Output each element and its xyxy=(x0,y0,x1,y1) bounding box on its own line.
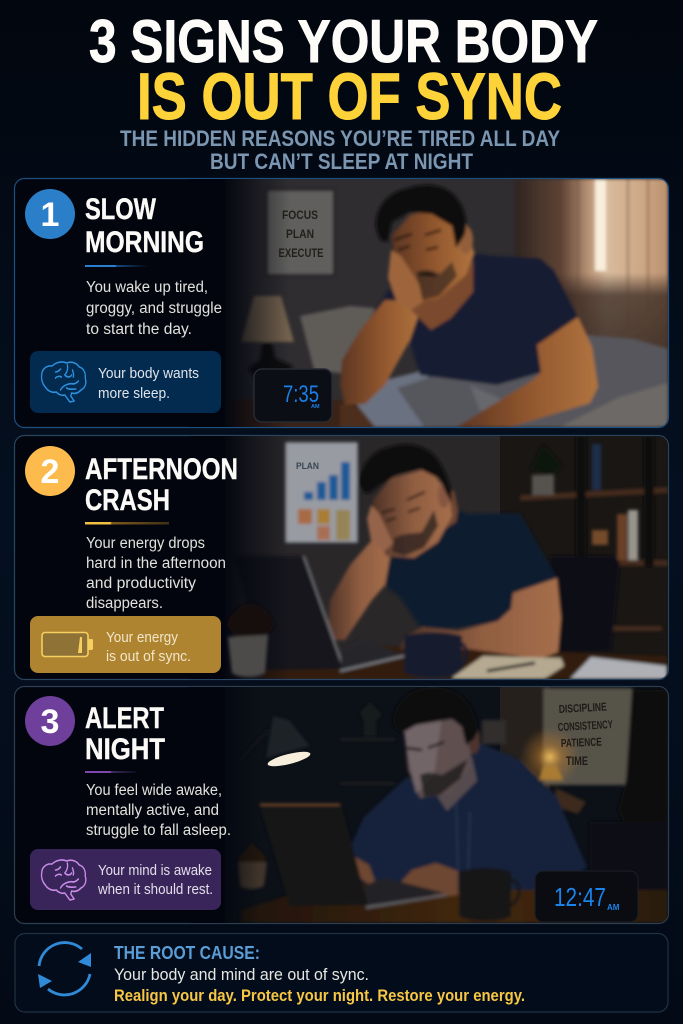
label: THE ROOT CAUSE: xyxy=(114,943,260,963)
icon: sync arrows xyxy=(38,943,91,995)
bookshelf xyxy=(520,487,668,631)
mug xyxy=(459,868,511,921)
alarm clock 12:47: AM xyxy=(607,903,620,912)
callout: mind is awake xyxy=(30,849,221,910)
desk xyxy=(240,880,668,923)
whiteboard xyxy=(285,442,358,543)
photo: man awake at laptop xyxy=(190,687,668,923)
eyes and brows xyxy=(394,230,441,250)
poster text: EXECUTE xyxy=(278,246,324,260)
heading: slow morning: MORNING xyxy=(85,226,204,259)
hair xyxy=(393,687,478,745)
number badge 1 xyxy=(25,189,75,239)
alarm clock 12:47 xyxy=(535,871,638,922)
desk xyxy=(262,646,667,679)
callout: energy out of sync: Your energy xyxy=(106,630,179,646)
description text: groggy, and struggle xyxy=(86,300,222,317)
laptop base xyxy=(365,878,445,907)
plant on shelf xyxy=(530,444,563,476)
description text: struggle to fall asleep. xyxy=(86,822,231,839)
desk lamp xyxy=(240,730,268,760)
bedside table xyxy=(240,398,356,427)
beard and moustache xyxy=(416,262,457,300)
poster words xyxy=(558,701,613,768)
heading: alert night: ALERT xyxy=(85,702,164,735)
hair xyxy=(376,185,466,248)
description text xyxy=(86,535,226,612)
heading: alert night: NIGHT xyxy=(85,733,165,766)
neck xyxy=(409,260,473,330)
left fade xyxy=(190,436,290,679)
title xyxy=(89,8,598,133)
callout: energy out of sync: is out of sync. xyxy=(106,649,191,665)
poster text: PLAN xyxy=(286,227,314,241)
description text: Your energy drops xyxy=(86,535,205,552)
pot plant xyxy=(238,843,266,867)
poster words: DISCIPLINE xyxy=(559,701,607,716)
poster xyxy=(543,688,632,785)
bedding xyxy=(345,370,455,427)
accent rule xyxy=(85,522,169,524)
panel: alert night xyxy=(14,686,668,924)
curtains and window xyxy=(515,179,668,348)
subtitle line 1: THE HIDDEN REASONS YOU’RE TIRED ALL DAY xyxy=(120,126,560,151)
neck xyxy=(446,488,462,530)
hoodie xyxy=(352,743,587,895)
description text: and productivity xyxy=(86,575,196,592)
accent rule xyxy=(85,265,148,267)
root cause statement: Your body and mind are out of sync. xyxy=(114,965,369,984)
description text xyxy=(86,782,231,839)
beard xyxy=(392,510,438,556)
left fade xyxy=(190,179,290,427)
icon: low battery xyxy=(42,632,93,656)
hair xyxy=(358,444,452,503)
icon: brain xyxy=(42,362,86,402)
description text: You wake up tired, xyxy=(86,279,208,296)
title line 2: IS OUT OF SYNC xyxy=(137,59,562,133)
picture frame xyxy=(482,720,506,744)
head xyxy=(392,205,474,303)
heading: afternoon crash: AFTERNOON xyxy=(85,453,238,486)
alarm clock 12:47: 12:47 xyxy=(554,882,606,912)
laptop xyxy=(235,556,343,670)
icon: brain xyxy=(42,860,86,900)
number badge 3: 3 xyxy=(41,703,59,741)
desk lamp base glow xyxy=(520,727,580,787)
panel: slow morning xyxy=(14,178,668,428)
notebook xyxy=(453,656,564,679)
hand xyxy=(367,505,393,551)
callout: body wants more sleep: Your body wants xyxy=(98,366,199,382)
neck xyxy=(430,757,477,811)
photo: man slumped at desk xyxy=(190,436,668,679)
number badge 1: 1 xyxy=(41,196,59,234)
right arm xyxy=(457,317,598,427)
callout: mind is awake: Your mind is awake xyxy=(98,863,212,879)
lamp xyxy=(241,296,294,342)
heading: afternoon crash: CRASH xyxy=(85,484,170,517)
beard xyxy=(420,759,468,797)
number badge 2: 2 xyxy=(41,453,59,491)
heading: alert night xyxy=(85,702,165,766)
description text: disappears. xyxy=(86,595,163,612)
heading: afternoon crash xyxy=(85,453,238,517)
poster frame xyxy=(267,190,334,275)
paper xyxy=(570,657,667,679)
description text: mentally active, and xyxy=(86,802,219,819)
sideboard xyxy=(590,822,668,902)
head xyxy=(404,712,472,798)
description text xyxy=(86,279,222,338)
hands xyxy=(392,863,458,898)
heading: slow morning xyxy=(85,193,204,259)
ear xyxy=(459,226,473,254)
shirt xyxy=(377,508,557,630)
poster text: FOCUS xyxy=(282,208,318,222)
number badge 2 xyxy=(25,446,75,496)
eyes xyxy=(381,492,425,521)
pot plant xyxy=(227,603,275,677)
subtitle xyxy=(120,126,560,174)
callout: mind is awake: when it should rest. xyxy=(97,882,213,898)
left fade xyxy=(190,687,260,923)
chair xyxy=(550,556,619,652)
shelves xyxy=(340,738,395,785)
panel: afternoon crash xyxy=(14,436,668,680)
heading: slow morning: SLOW xyxy=(85,193,157,226)
hand xyxy=(388,250,423,310)
alarm clock 7:35: AM xyxy=(311,404,320,410)
poster text xyxy=(279,210,324,257)
poster words: TIME xyxy=(566,756,588,768)
mug xyxy=(404,632,462,678)
callout: body wants more sleep: more sleep. xyxy=(98,386,170,402)
poster words: CONSISTENCY xyxy=(558,719,613,734)
callout: energy out of sync xyxy=(30,616,221,673)
photo: tired man in bed xyxy=(190,179,668,427)
eyes xyxy=(406,742,444,750)
number badge 3 xyxy=(25,696,75,746)
right arm xyxy=(400,578,561,659)
description text: hard in the afternoon xyxy=(86,555,226,572)
alarm clock 7:35: 7:35 xyxy=(283,381,319,408)
lamp bulb light xyxy=(266,749,312,769)
ear xyxy=(468,726,480,754)
panel: root cause xyxy=(15,934,668,1012)
subtitle line 2: BUT CAN’T SLEEP AT NIGHT xyxy=(210,149,473,174)
ear xyxy=(438,482,450,508)
head xyxy=(373,468,452,558)
laptop lid xyxy=(260,805,368,906)
dark plant right xyxy=(618,690,668,840)
callout: body wants more sleep xyxy=(30,351,221,413)
pillow xyxy=(300,306,386,376)
description text: You feel wide awake, xyxy=(86,782,222,799)
accent rule xyxy=(85,771,136,773)
call to action: Realign your day. Protect your night. Restore your energy. xyxy=(114,986,525,1005)
left arm xyxy=(327,540,393,640)
description text: to start the day. xyxy=(86,321,192,338)
poster words: PATIENCE xyxy=(561,737,602,750)
shirt xyxy=(363,253,578,385)
pen xyxy=(487,663,535,671)
alarm clock 7:35 xyxy=(254,369,332,422)
board heading: PLAN xyxy=(296,461,319,472)
left forearm xyxy=(340,300,423,405)
